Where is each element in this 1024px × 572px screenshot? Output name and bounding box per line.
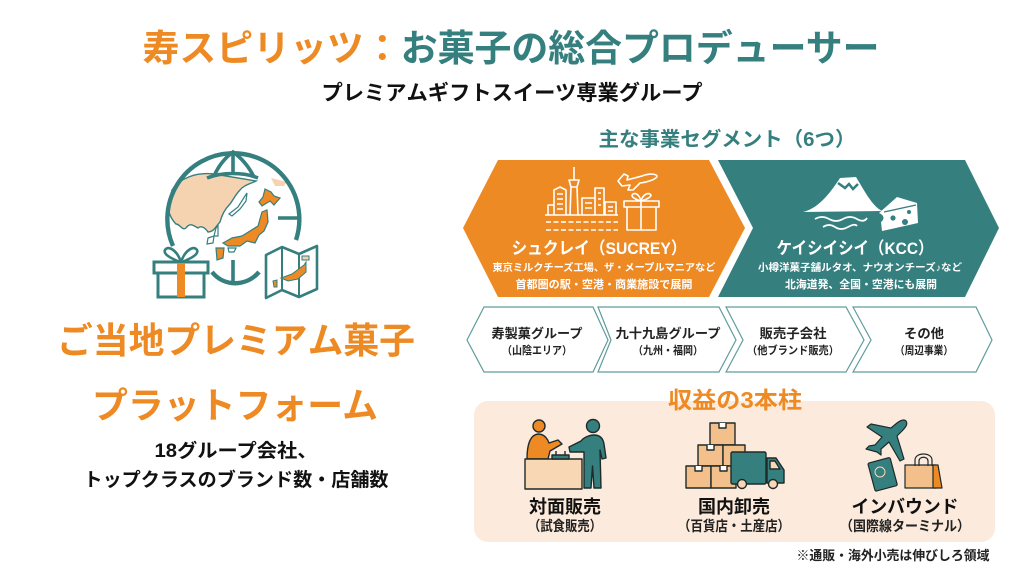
pillar: face-to-face sales: （試食販売）: [528, 518, 602, 534]
heading: revenue pillars: 収益の3本柱: [668, 387, 802, 413]
pillar: domestic wholesale: 国内卸売: [698, 497, 770, 517]
pillar: face-to-face sales: 対面販売: [529, 497, 601, 517]
segment: Tsukumojima group: （九州・福岡）: [633, 343, 703, 357]
pillar: inbound: [840, 420, 970, 534]
segment: Kotobuki confectionery group: [467, 307, 608, 372]
text: Sucrey description: 東京ミルクチーズ工場、ザ・メープルマニアなど: [492, 261, 716, 274]
segment: other: [853, 307, 992, 372]
text: Sucrey description: シュクレイ（SUCREY）: [512, 239, 686, 258]
segment: other: その他: [904, 326, 944, 341]
icon: counter sale: [525, 420, 606, 489]
segment: Tsukumojima group: 九十九島グループ: [616, 326, 720, 341]
heading: premium sweets platform: プラットフォーム: [92, 385, 378, 426]
icon: globe with Japan, gift and map: [154, 152, 317, 298]
pillar: inbound: （国際線ターミナル）: [840, 518, 970, 534]
pillar: inbound: インバウンド: [852, 497, 958, 517]
icon: boxes and truck: [686, 423, 784, 488]
text: KCC description: [758, 239, 962, 291]
segment: sales subsidiaries: [726, 307, 864, 372]
footnote: ※通販・海外小売は伸びしろ領域: [796, 548, 990, 563]
panel: KCC: [718, 160, 999, 297]
segment: Kotobuki confectionery group: （山陰エリア）: [502, 343, 572, 357]
segment: Tsukumojima group: [598, 307, 736, 372]
panel: three revenue pillars: [474, 387, 995, 542]
segment: Kotobuki confectionery group: 寿製菓グループ: [492, 326, 582, 341]
pillar: domestic wholesale: [678, 423, 790, 534]
heading: premium sweets platform: ご当地プレミアム菓子: [57, 320, 415, 361]
segment: sales subsidiaries: 販売子会社: [760, 326, 826, 341]
text block: group companies: 18グループ会社、: [154, 439, 318, 462]
icon: gift: [154, 248, 208, 297]
segment: other: （周辺事業）: [895, 343, 953, 357]
pillar: domestic wholesale: （百貨店・土産店）: [678, 518, 790, 534]
left panel: platform: [57, 152, 415, 491]
text: KCC description: 小樽洋菓子舗ルタオ、ナウオンチーズ♪など: [758, 261, 962, 274]
text: KCC description: 北海道発、全国・空港にも展開: [785, 277, 937, 291]
icon: Mt Fuji, water and cheese: [803, 177, 918, 231]
icon: city skyline, plane and gift: [545, 167, 659, 230]
icon: plane, passport and shopping bag: [866, 420, 942, 491]
segment: sales subsidiaries: （他ブランド販売）: [747, 343, 839, 357]
heading: premium sweets platform: [57, 320, 415, 426]
text: Sucrey description: [492, 239, 716, 291]
icon: folded map: [266, 246, 317, 298]
subtitle: プレミアムギフトスイーツ専業グループ: [322, 81, 702, 105]
text: Sucrey description: 首都圏の駅・空港・商業施設で展開: [516, 277, 692, 291]
text block: group companies: トップクラスのブランド数・店舗数: [84, 468, 388, 491]
text block: group companies: [84, 439, 388, 491]
panel: Sucrey: [463, 160, 745, 297]
title: 寿スピリッツ：お菓子の総合プロデューサー: [142, 27, 880, 69]
text: KCC description: ケイシイシイ（KCC）: [776, 239, 934, 258]
heading: business segments: 主な事業セグメント（6つ）: [598, 127, 856, 151]
pillar: face-to-face sales: [525, 420, 606, 534]
